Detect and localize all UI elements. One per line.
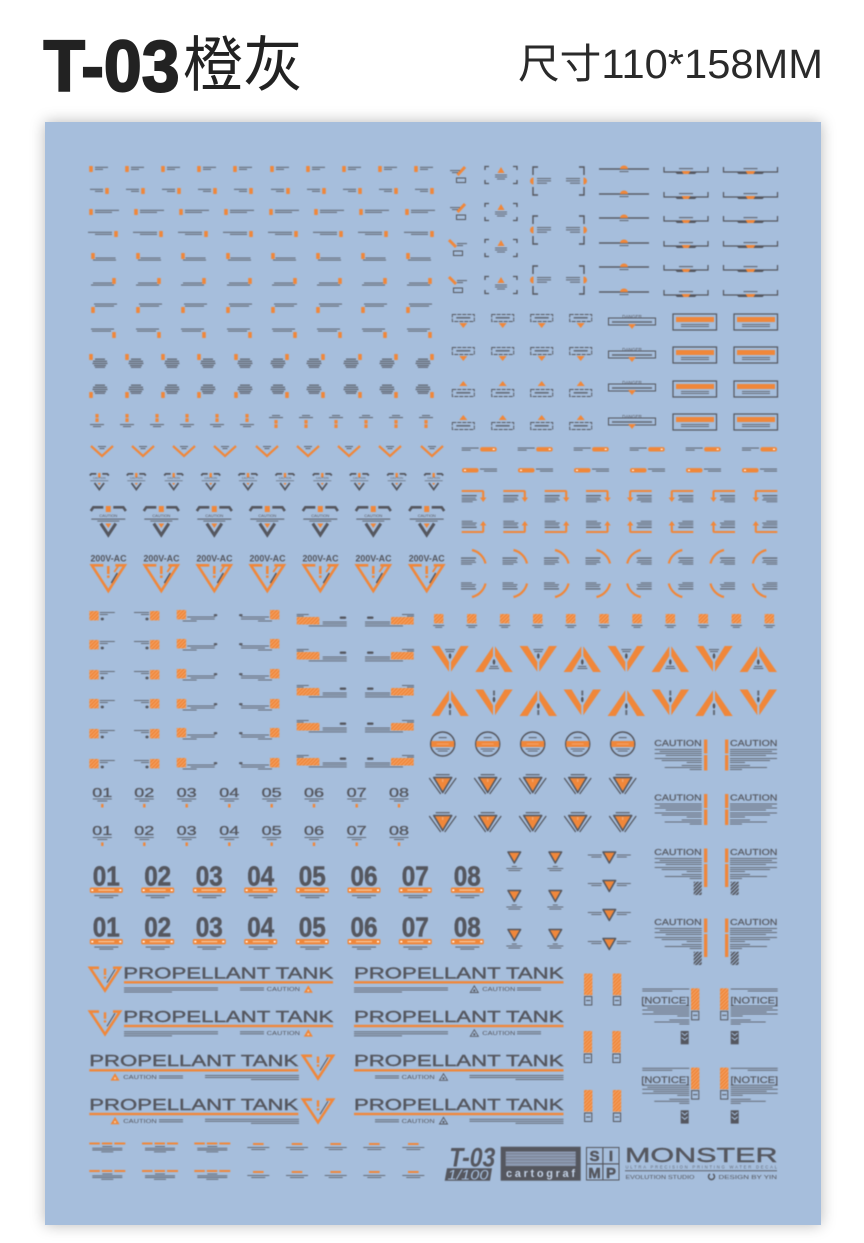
propellant tank labels, right column: CAUTION [482,987,515,993]
large numbers 01-08, two rows: 06 [350,912,378,942]
200V-AC warning triangles row [90,554,445,591]
small numbers 01-08, two rows: 07 [347,786,367,800]
notice text blocks: [NOTICE] [641,1075,689,1086]
hatched square marks, left block [89,610,414,770]
large numbers 01-08, two rows: 02 [144,912,171,942]
small numbers 01-08, two rows: 07 [347,824,367,838]
small numbers 01-08, two rows: 05 [262,824,282,838]
propellant tank labels, right column: PROPELLANT TANK [354,1009,564,1026]
200V-AC warning triangles row: 200V-AC [302,554,339,564]
propellant tank labels, right column [354,965,564,1125]
logo: SI MP: P [606,1165,616,1182]
large numbers 01-08, two rows [90,860,484,950]
large caution triangles row: CAUTION [152,513,170,518]
large numbers 01-08, two rows: 04 [247,912,275,942]
propellant tank labels, right column: PROPELLANT TANK [354,1097,564,1114]
large caution triangles row: CAUTION [99,513,117,518]
propellant tank labels, left column: CAUTION [267,987,300,993]
small caution triangles row [90,473,443,490]
caution text blocks: CAUTION [730,847,777,857]
small numbers 01-08, two rows: 03 [177,786,197,800]
small numbers 01-08, two rows: 04 [219,786,239,800]
small caution triangles row: CAUTION [242,476,254,480]
caution text blocks: CAUTION [730,738,777,748]
logo: SI MP [586,1147,619,1182]
propellant tank labels, left column: PROPELLANT TANK [89,1097,299,1114]
small numbers 01-08, two rows: 01 [92,786,112,800]
logo: MONSTER: EVOLUTION STUDIO [626,1175,695,1181]
small tag and arrow marks [452,314,592,430]
200V-AC warning triangles row: 200V-AC [409,554,445,564]
notice text blocks: [NOTICE] [730,1075,778,1086]
large caution triangles row: CAUTION [418,513,436,518]
caution text blocks: CAUTION [654,738,702,748]
caution text blocks: CAUTION [654,847,702,857]
logo: SI MP: M [588,1165,601,1182]
upper right marks: diagonal tags, brackets, lines [449,166,778,297]
notice text blocks: [NOTICE] [730,996,778,1006]
large numbers 01-08, two rows: 08 [454,912,481,942]
hatched small squares row [433,614,775,628]
logo: T-03 1/100 [445,1142,495,1182]
small caution triangles row: CAUTION [204,476,217,480]
large numbers 01-08, two rows: 07 [402,912,429,942]
small dash marks, bottom row [89,1142,424,1180]
large numbers 01-08, two rows: 02 [144,860,171,892]
title [43,28,303,98]
propellant tank labels, left column: PROPELLANT TANK [123,965,334,982]
circular notice badges [431,732,635,756]
caution text blocks: CAUTION [654,917,702,927]
danger labels: DANGER [622,347,643,352]
propellant tank labels, right column: PROPELLANT TANK [354,1053,564,1070]
small numbers 01-08, two rows: 05 [262,786,282,800]
propellant tank labels, right column: CAUTION [402,1119,435,1125]
small numbers 01-08, two rows: 02 [134,786,154,800]
small caution triangles row: CAUTION [390,476,403,480]
200V-AC warning triangles row: 200V-AC [356,554,392,564]
title: 橙灰 [183,32,303,98]
pill tag rows [462,447,777,472]
caution text blocks: CAUTION [730,917,777,927]
large numbers 01-08, two rows: 03 [196,912,223,942]
200V-AC warning triangles row: 200V-AC [144,554,180,564]
logo: SI MP: S [589,1148,600,1165]
200V-AC warning triangles row: 200V-AC [250,554,286,564]
small numbers 01-08, two rows: 06 [304,824,324,838]
logo: MONSTER [625,1145,778,1181]
large numbers 01-08, two rows: 05 [299,912,326,942]
200V-AC warning triangles row: 200V-AC [196,554,233,564]
large caution triangles row: CAUTION [205,513,223,518]
orange chevron row [91,446,443,456]
caution text blocks: CAUTION [654,792,702,802]
logo: T-03 1/100: T-03 [449,1142,495,1172]
caution boxes [673,314,778,430]
notice text blocks [641,988,778,1124]
small numbers 01-08, two rows: 02 [134,824,154,838]
small orange triangles [506,852,631,950]
danger labels: DANGER [622,414,643,419]
large numbers 01-08, two rows: 03 [196,860,223,892]
small marks rows, upper left [88,166,435,428]
small caution triangles row: CAUTION [279,476,291,480]
orange danger triangles [429,774,636,832]
propellant tank labels, right column: PROPELLANT TANK [354,965,564,982]
large numbers 01-08, two rows: 01 [93,860,120,892]
large numbers 01-08, two rows: 01 [93,912,120,942]
small caution triangles row: CAUTION [427,476,440,480]
small caution triangles row: CAUTION [167,476,180,480]
small caution triangles row: CAUTION [316,476,329,480]
vertical hatched bars [584,974,621,1122]
logo: SI MP: I [609,1148,613,1165]
small numbers 01-08, two rows [92,786,409,846]
logo: MONSTER: DESIGN BY YIN [718,1175,777,1181]
small numbers 01-08, two rows: 06 [304,786,324,800]
large caution triangles row: CAUTION [364,513,382,518]
small caution triangles row: CAUTION [130,476,143,480]
caution text blocks: CAUTION [730,792,777,802]
propellant tank labels, left column [89,965,334,1125]
large numbers 01-08, two rows: 05 [299,860,326,892]
propellant tank labels, right column: CAUTION [402,1075,435,1081]
propellant tank labels, left column: CAUTION [123,1075,157,1081]
large numbers 01-08, two rows: 07 [402,860,429,892]
large caution triangles row: CAUTION [258,513,276,518]
200V-AC warning triangles row: 200V-AC [90,554,127,564]
small numbers 01-08, two rows: 01 [92,824,112,838]
small numbers 01-08, two rows: 08 [389,786,409,800]
logo: MONSTER: MONSTER [625,1145,778,1167]
notice bracket arrows [462,491,777,532]
size label: 尺寸110*158MM [518,41,823,87]
logo: MONSTER: ULTRA PRECISION PRINTING WATER DECAL [626,1164,778,1170]
large caution triangles row: CAUTION [311,513,329,518]
propellant tank labels, left column: PROPELLANT TANK [123,1009,334,1026]
large numbers 01-08, two rows: 04 [247,860,275,892]
small numbers 01-08, two rows: 03 [177,824,197,838]
logo: cartograf: cartograf [506,1168,575,1180]
danger labels: DANGER [622,314,643,319]
notice arc marks [461,550,777,597]
propellant tank labels, right column: CAUTION [482,1031,515,1037]
logo: T-03 1/100: 1/100 [448,1166,489,1182]
propellant tank labels, left column: CAUTION [123,1119,157,1125]
small numbers 01-08, two rows: 08 [389,824,409,838]
danger labels: DANGER [622,380,643,385]
panel: decal sheet [45,122,821,1225]
notice text blocks: [NOTICE] [641,996,689,1006]
small numbers 01-08, two rows: 04 [219,824,239,838]
propellant tank labels, left column: CAUTION [267,1031,300,1037]
large numbers 01-08, two rows: 06 [350,860,378,892]
danger labels [608,314,656,429]
propellant tank labels, left column: PROPELLANT TANK [89,1053,299,1070]
large caution triangles row [91,506,444,535]
orange wing marks [431,646,777,716]
small caution triangles row: CAUTION [93,476,106,480]
logo: cartograf [501,1147,581,1181]
caution text blocks [654,738,777,965]
small caution triangles row: CAUTION [353,476,366,480]
large numbers 01-08, two rows: 08 [454,860,481,892]
